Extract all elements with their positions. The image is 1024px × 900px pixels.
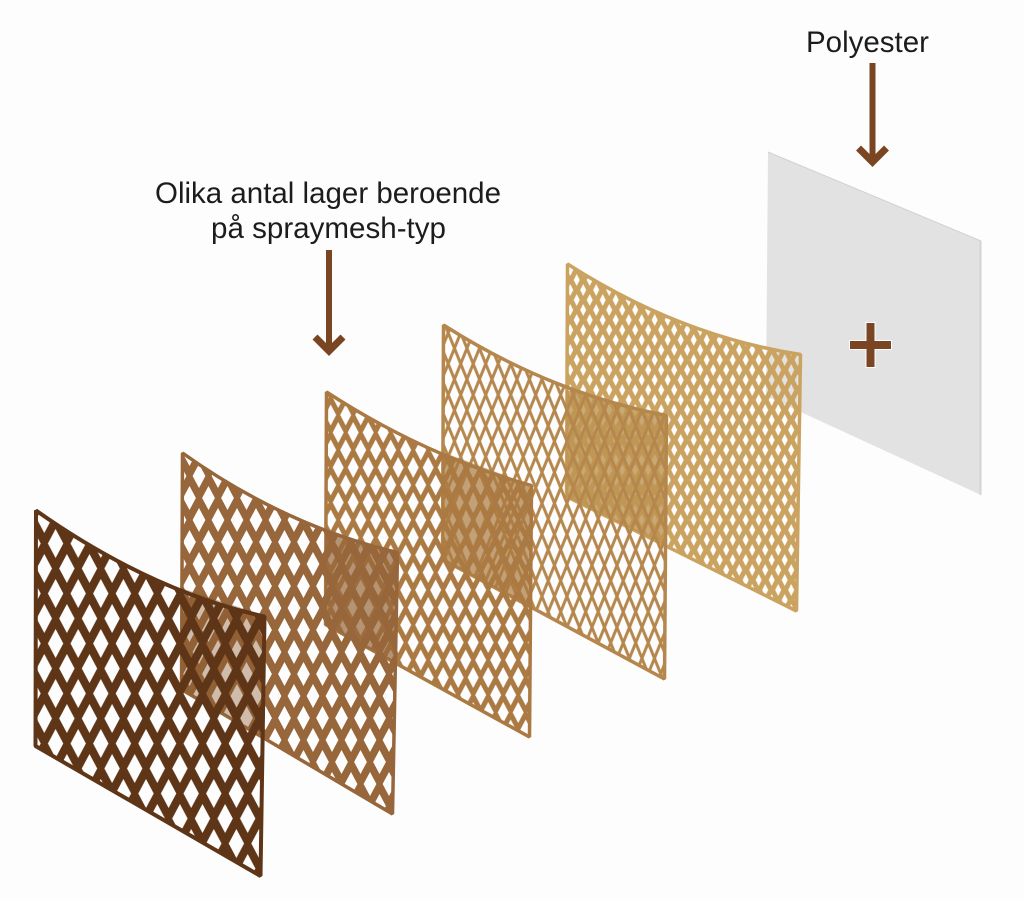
- mesh layer 2: [182, 453, 398, 814]
- panel: polyester sheet: [766, 152, 981, 495]
- label: spraymesh layers: på spraymesh-typ: [211, 212, 446, 245]
- label: polyester: Polyester: [806, 26, 929, 59]
- mesh layer 4: [442, 325, 666, 679]
- arrow: spraymesh layers: [315, 250, 343, 351]
- label: spraymesh layers: [155, 177, 501, 245]
- label: spraymesh layers: Olika antal lager beroende: [155, 177, 501, 210]
- mesh layer 3: [326, 392, 532, 737]
- icon: plus sign: [849, 322, 892, 368]
- arrow: polyester: [858, 63, 886, 162]
- mesh layer 1: [36, 510, 264, 876]
- mesh layer 5: [566, 264, 800, 611]
